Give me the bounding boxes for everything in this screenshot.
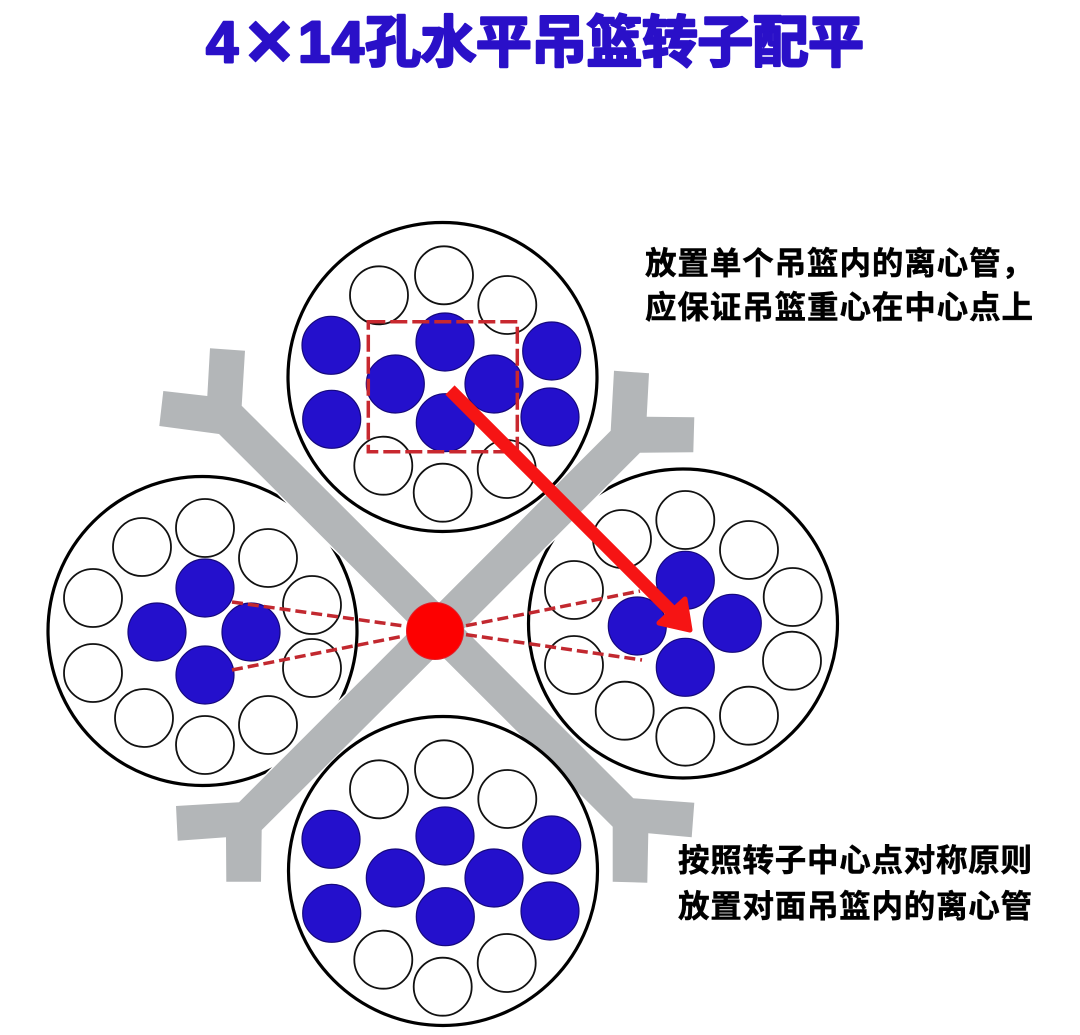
title: 14 <box>298 10 364 75</box>
title <box>206 0 864 85</box>
callout: bottom right note: 放置对面吊篮内的离心管 <box>678 888 1032 924</box>
callout: top right note <box>645 245 1033 325</box>
callout: bottom right note <box>678 842 1032 924</box>
left basket empty tubes <box>64 499 341 774</box>
callout: bottom right note: 按照转子中心点对称原则 <box>678 842 1032 878</box>
bottom basket empty tubes <box>350 740 536 1016</box>
top basket outer ring <box>288 222 597 532</box>
right basket empty tubes <box>545 491 822 766</box>
panel: bottom basket <box>288 716 598 1026</box>
top basket loaded tubes <box>302 313 581 452</box>
rotor cross arms <box>159 348 694 883</box>
panel: left basket <box>48 476 357 786</box>
right basket outer ring <box>528 469 838 778</box>
rotor centre point <box>406 602 464 660</box>
left basket outer ring <box>48 476 357 786</box>
callout: top right note: 应保证吊篮重心在中心点上 <box>645 289 1033 325</box>
dashed lines to rotor centre <box>232 591 642 670</box>
right basket loaded tubes <box>608 551 761 696</box>
title: 4 <box>206 10 238 75</box>
left basket loaded tubes <box>128 559 280 704</box>
top basket empty tubes <box>350 246 536 522</box>
callout: top right note: 放置单个吊篮内的离心管， <box>645 245 1033 281</box>
bottom basket outer ring <box>288 716 598 1026</box>
dashed rectangle around centre group <box>368 322 517 452</box>
title: 孔水平吊篮转子配平 <box>365 11 864 74</box>
panel: top basket <box>288 222 597 532</box>
panel: right basket <box>528 469 838 778</box>
bottom basket loaded tubes <box>302 807 581 946</box>
red arrow <box>450 390 690 630</box>
